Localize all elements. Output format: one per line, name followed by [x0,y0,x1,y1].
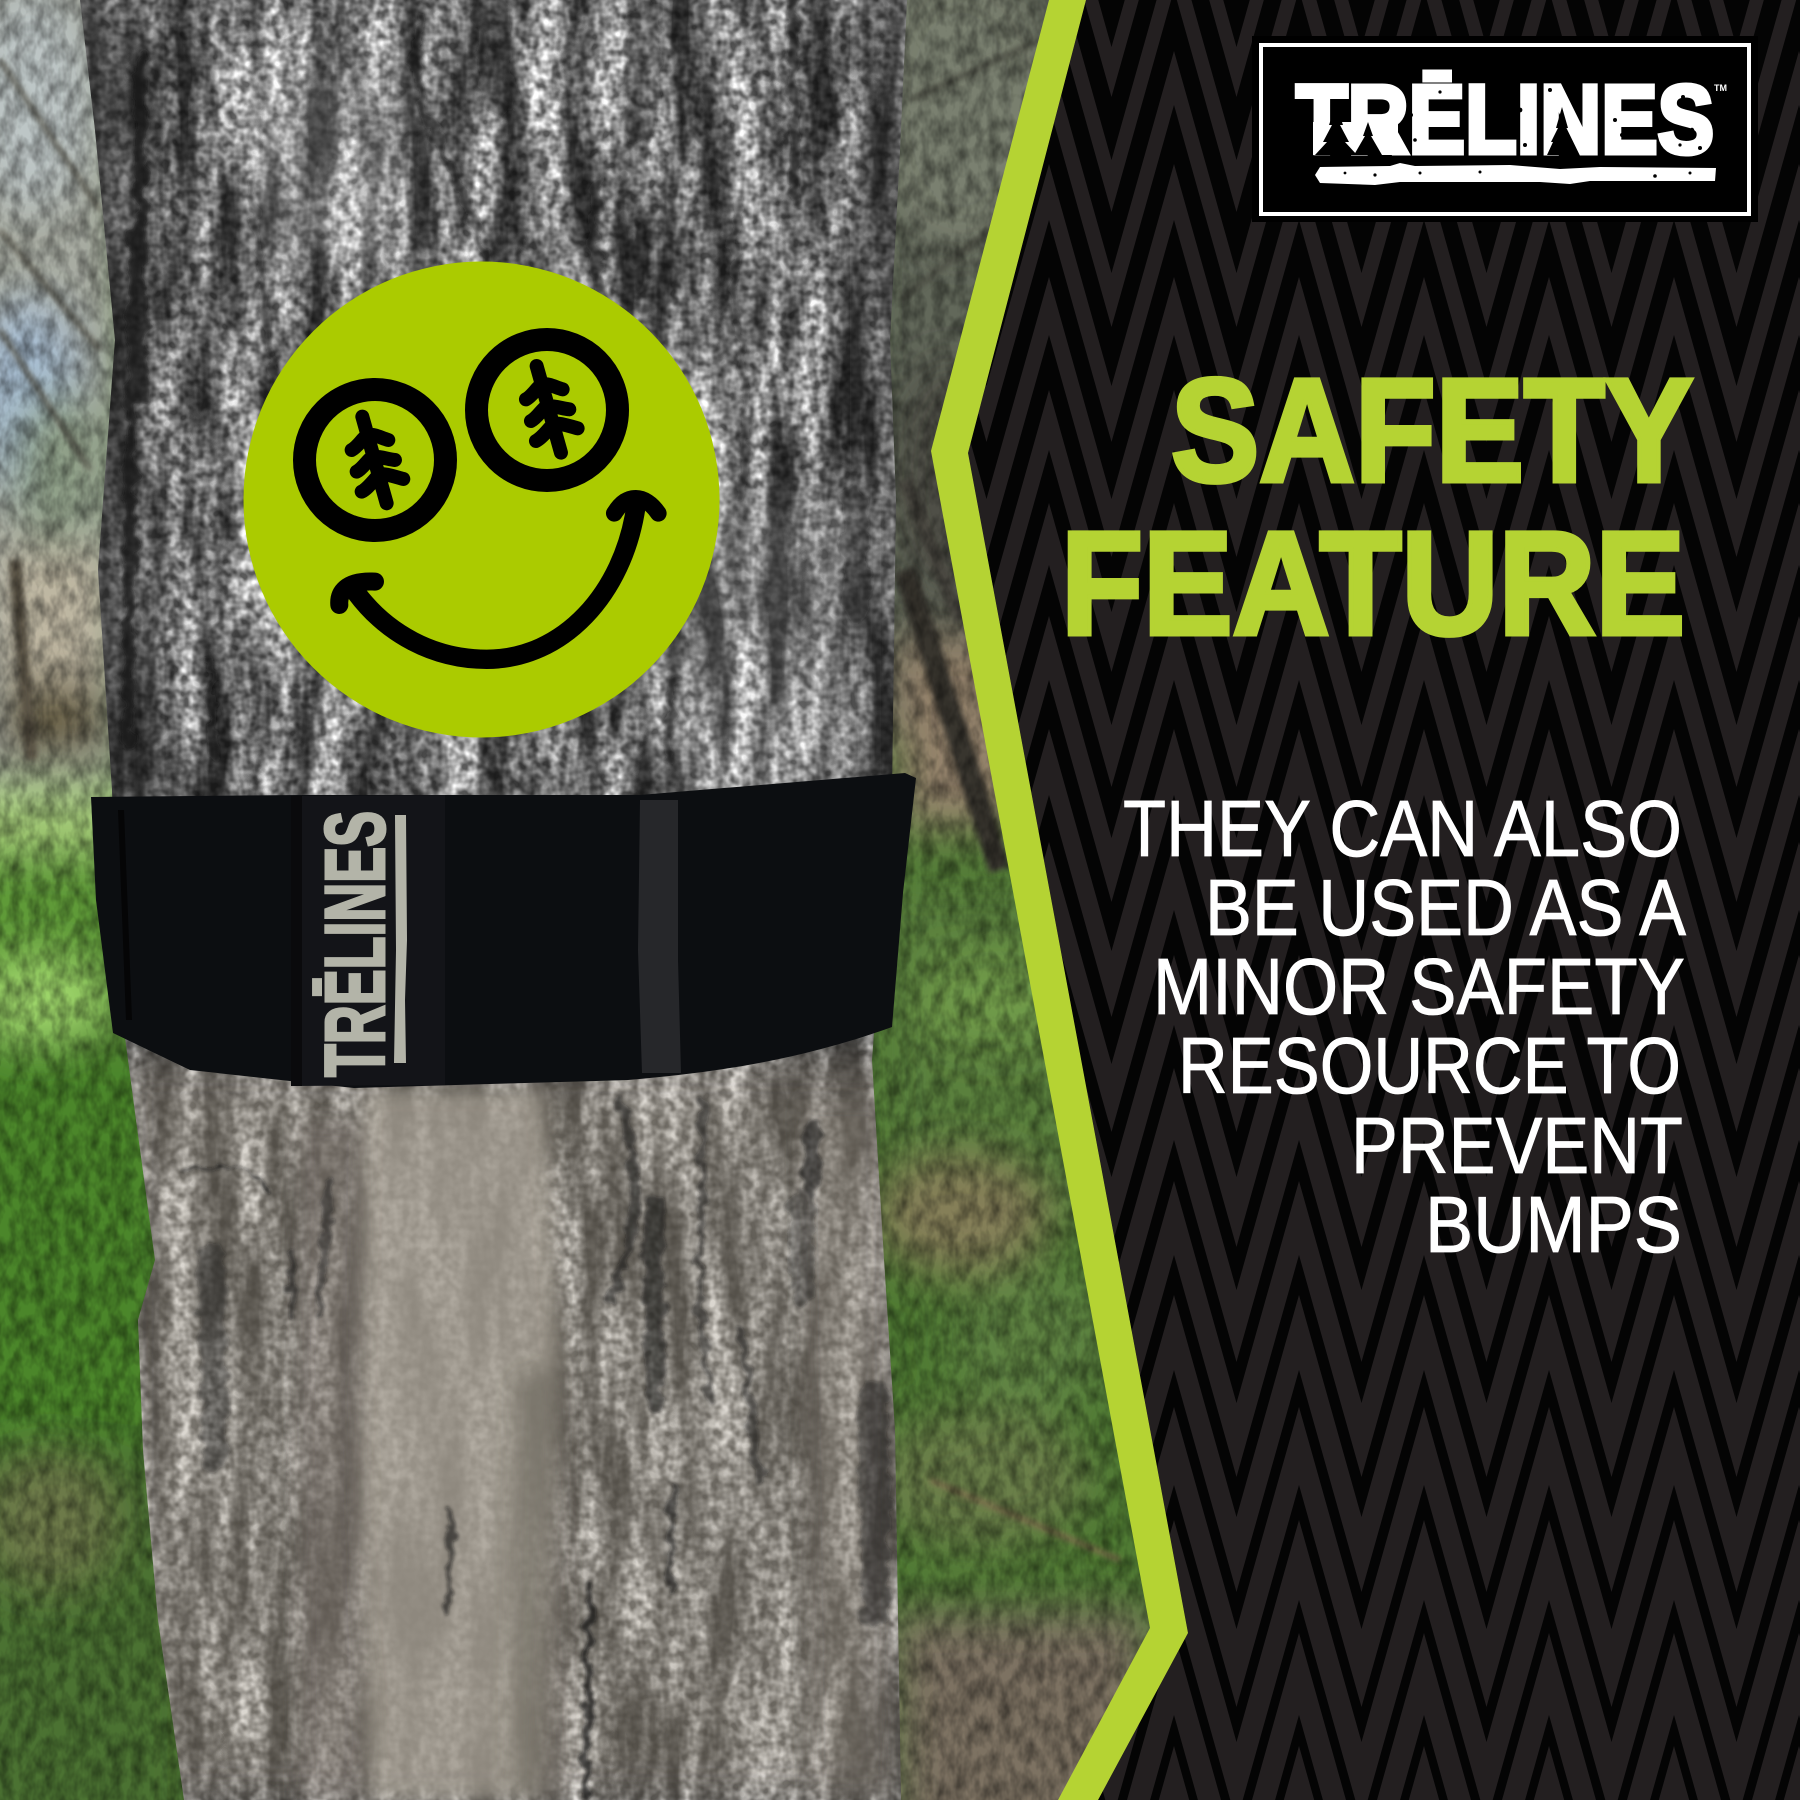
photo: dark bark fissures [128,0,875,1796]
band: vertical logo text on label: TRĒLINES [308,811,402,1077]
heading: safety feature [1061,349,1693,666]
heading: safety feature: FEATURE [1061,502,1685,666]
brand logo box [1252,36,1758,222]
smiley: left eye [304,390,446,530]
band: woven label patch [291,795,445,1086]
body text: safety description: PREVENT [1351,1101,1683,1190]
body text: safety description: BE USED AS A [1205,863,1687,952]
product: black hook-and-loop tree band [91,773,916,1088]
body text: safety description: BUMPS [1425,1180,1682,1269]
photo: park background behind the tree [0,0,1220,1800]
smiley badge with tree eyes [244,262,720,738]
logo: white fill behind pines [1313,122,1398,155]
logo: log underline [1315,163,1716,185]
body text: safety description [1123,784,1687,1269]
logo: pine tree cut-outs [1315,104,1577,155]
right panel: black chevron background [900,0,1800,1800]
lime green angled border [931,0,1188,1800]
smiley: smile arrow curve [339,498,658,659]
body text: safety description: RESOURCE TO [1178,1021,1681,1110]
body text: safety description: MINOR SAFETY [1153,942,1685,1031]
photo: tree trunk with bark texture [60,0,920,1800]
heading: safety feature: SAFETY [1171,349,1693,513]
smiley: right eye [476,340,618,480]
logo: wordmark: TRĒLINES [1296,65,1714,174]
logo: distressed speckle [1344,88,1702,178]
logo: trademark: TM [1714,83,1727,93]
body text: safety description: THEY CAN ALSO [1123,784,1682,873]
band: nylon strap loop [638,800,681,1073]
